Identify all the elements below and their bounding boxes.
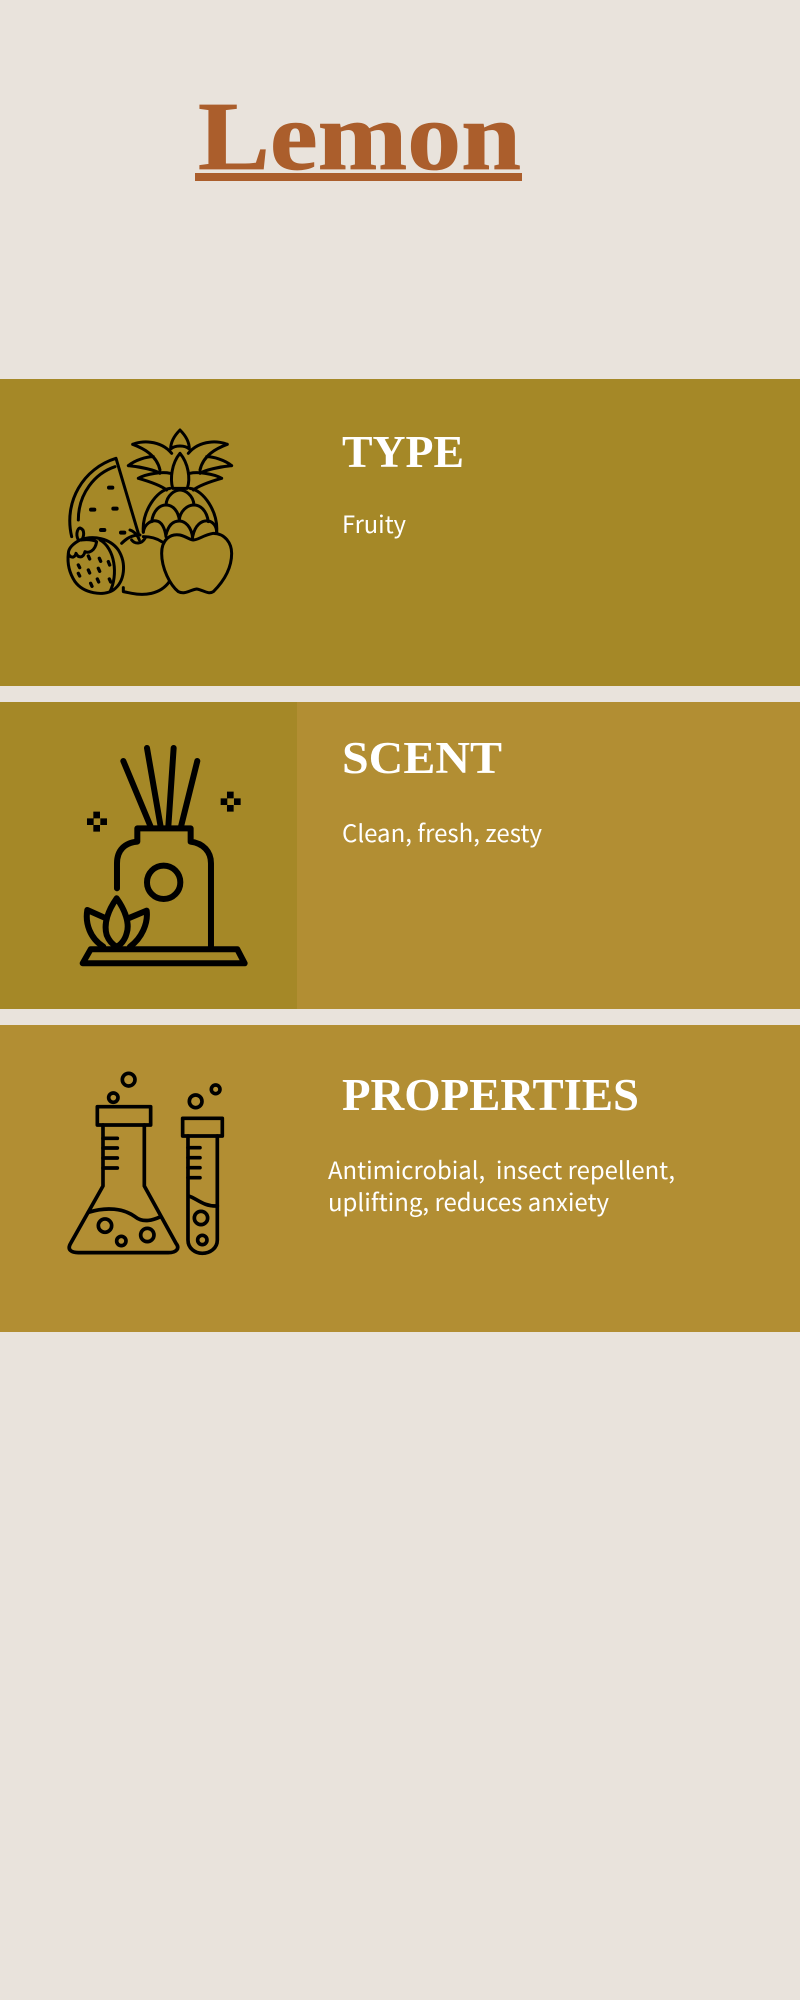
text: type value: Fruity (342, 505, 406, 540)
icon: reed diffuser (83, 748, 245, 963)
heading: type: TYPE (342, 427, 464, 477)
text: properties value: uplifting, reduces anxiety (328, 1183, 609, 1218)
icon: lab flask and test tube (69, 1073, 222, 1253)
panel: properties (0, 1025, 800, 1332)
heading: scent: SCENT (342, 733, 502, 783)
heading: properties: PROPERTIES (342, 1070, 639, 1120)
title: Lemon (198, 83, 521, 190)
text: scent value: Clean, fresh, zesty (342, 814, 542, 849)
icon: assorted fruit (68, 430, 232, 594)
text: properties value (328, 1151, 675, 1218)
text: properties value: Antimicrobial, insect repellent, (328, 1151, 675, 1186)
panel: scent (0, 702, 800, 1009)
panel: type (0, 379, 800, 686)
